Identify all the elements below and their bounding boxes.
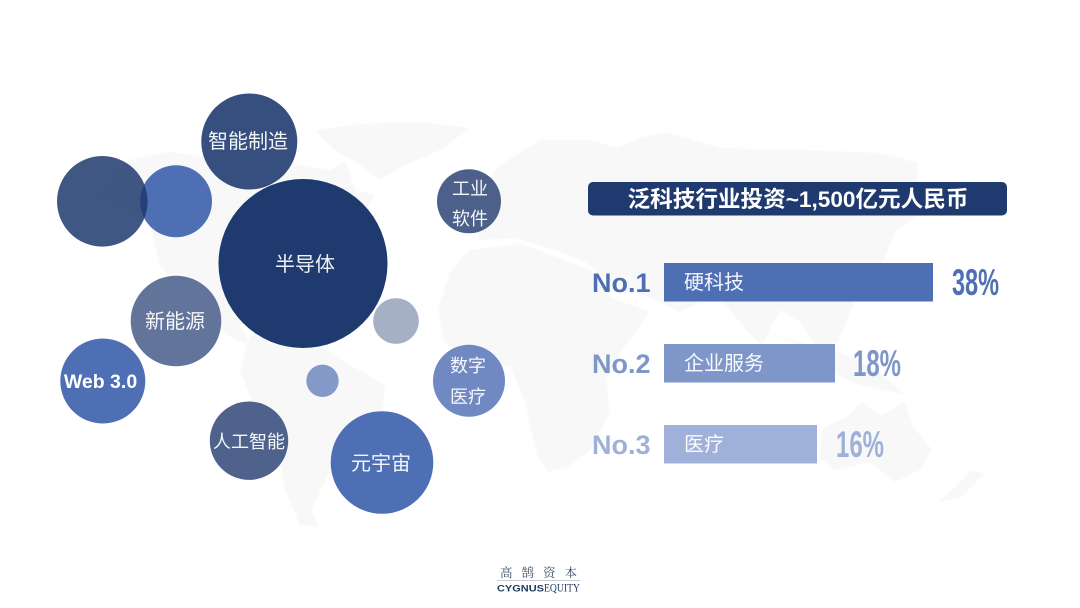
rank row 2 bbox=[592, 343, 901, 384]
rank row 3 bbox=[592, 424, 884, 465]
rank row 3: No.3 bbox=[592, 430, 651, 460]
title banner: 泛科技行业投资~1,500亿元人民币 bbox=[628, 187, 968, 212]
logo: Cygnus Equity: 高鹄资本 bbox=[500, 565, 586, 580]
rank row 1: 硬科技 bbox=[684, 271, 744, 294]
rank row 3: 16% bbox=[836, 424, 884, 465]
bubble: 元宇宙 bbox=[331, 411, 433, 514]
bubble: 新能源: 新能源 bbox=[145, 310, 205, 333]
bubble: pale grey unlabeled bbox=[373, 298, 419, 344]
logo: Cygnus Equity: CYGNUS bbox=[497, 584, 544, 594]
rank row 3: 医疗 bbox=[684, 433, 724, 456]
bubble: Web 3.0: Web 3.0 bbox=[64, 371, 137, 393]
rank row 2: No.2 bbox=[592, 349, 651, 379]
logo: Cygnus Equity bbox=[497, 565, 586, 594]
bubble: 数字医疗: 医疗 bbox=[450, 387, 486, 407]
bubble: 智能制造: 智能制造 bbox=[208, 130, 288, 153]
bubble: Web 3.0 bbox=[60, 338, 145, 424]
bubble: 新能源 bbox=[131, 276, 221, 366]
bubble: 半导体: 半导体 bbox=[275, 253, 335, 276]
bubble: 元宇宙: 元宇宙 bbox=[351, 452, 411, 475]
bubble: 工业软件 bbox=[437, 169, 501, 233]
world map background bbox=[100, 122, 984, 527]
rank row 2: 企业服务 bbox=[684, 352, 764, 375]
rank row 1: 38% bbox=[952, 262, 999, 303]
bubble: 人工智能 bbox=[210, 402, 288, 480]
bubble: 数字医疗 bbox=[433, 345, 505, 417]
rank row 1 bbox=[592, 262, 999, 303]
logo: Cygnus Equity: EQUITY bbox=[544, 582, 581, 594]
bubble: 工业软件: 工业 bbox=[452, 179, 488, 199]
bubble: 半导体 bbox=[218, 179, 388, 348]
bubble: 人工智能: 人工智能 bbox=[213, 432, 285, 452]
rank row 2: 18% bbox=[853, 343, 901, 384]
rank row 1: No.1 bbox=[592, 268, 651, 298]
bubble: blue unlabeled bbox=[140, 165, 212, 237]
bubble: 工业软件: 软件 bbox=[452, 209, 488, 229]
bubble: 智能制造 bbox=[201, 94, 297, 190]
title banner bbox=[588, 182, 1007, 216]
bubble: 数字医疗: 数字 bbox=[450, 356, 486, 376]
bubble: small blue unlabeled bbox=[306, 365, 339, 397]
bubble: dark unlabeled bbox=[57, 156, 148, 247]
